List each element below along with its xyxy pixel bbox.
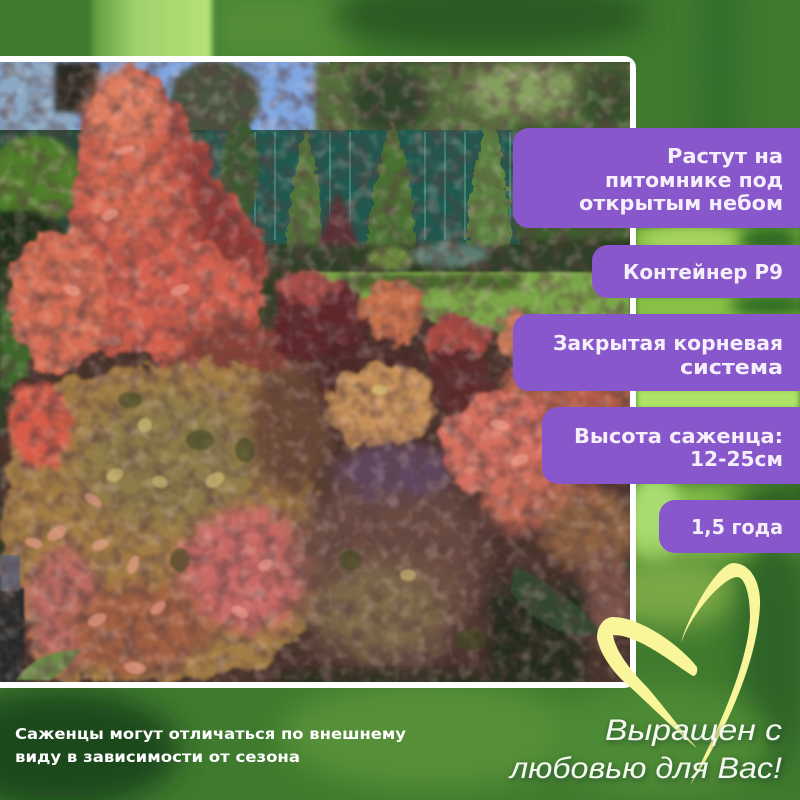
- info box: grown outdoors: питомнике под: [605, 168, 783, 192]
- slogan: Выращен с: [605, 714, 782, 747]
- info box: closed root system: система: [680, 355, 783, 379]
- info box: container: Контейнер Р9: [623, 260, 783, 284]
- info box: container: [592, 245, 800, 298]
- disclaimer note: [15, 725, 406, 766]
- heart icon: [597, 563, 760, 785]
- highlighted individual petals: [24, 144, 530, 676]
- info box: age: 1,5 года: [691, 515, 783, 539]
- slogan: любовью для Вас!: [508, 752, 783, 785]
- sky and trees: [0, 62, 630, 130]
- info box: grown outdoors: [513, 128, 800, 228]
- info box: grown outdoors: открытым небом: [579, 191, 783, 215]
- slogan: [508, 714, 783, 785]
- petal texture overlay: [0, 62, 630, 682]
- info box: closed root system: [513, 314, 800, 391]
- disclaimer note: виду в зависимости от сезона: [15, 748, 300, 766]
- info box: closed root system: Закрытая корневая: [553, 331, 783, 355]
- info box: seedling height: [542, 407, 800, 484]
- hydrangea flower masses: [0, 68, 640, 690]
- lawn: [0, 272, 630, 390]
- info box: seedling height: Высота саженца:: [574, 424, 783, 448]
- thuja trees and shrubs: [0, 116, 520, 272]
- photo frame: hydrangea in garden: [0, 56, 640, 692]
- info box: age: [659, 500, 800, 553]
- info box: seedling height: 12-25см: [690, 447, 783, 471]
- dark foreground leaves and ground: [0, 555, 600, 692]
- disclaimer note: Саженцы могут отличаться по внешнему: [15, 725, 406, 743]
- green fence: [0, 125, 630, 245]
- info box: grown outdoors: Растут на: [667, 144, 783, 168]
